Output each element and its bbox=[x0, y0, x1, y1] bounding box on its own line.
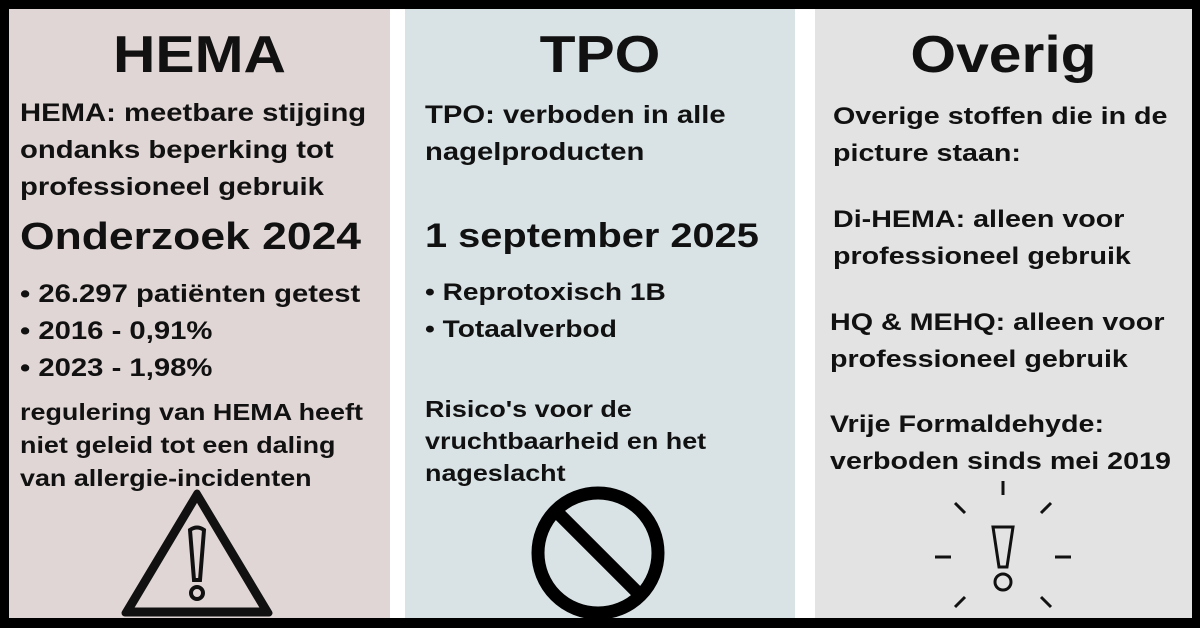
bullet list: • 2016 - 0,91% bbox=[20, 317, 212, 345]
text block: HQ & MEHQ: professioneel gebruik bbox=[830, 346, 1128, 373]
text block: HQ & MEHQ: HQ & MEHQ: alleen voor bbox=[830, 309, 1164, 336]
text block: conclusion: van allergie-incidenten bbox=[20, 465, 312, 491]
bullet list: • 26.297 patiënten getest bbox=[20, 280, 360, 308]
icon: warning triangle bbox=[122, 490, 272, 616]
text block: conclusion: regulering van HEMA heeft bbox=[20, 399, 363, 425]
subheading: date: 1 september 2025 bbox=[425, 217, 759, 255]
heading: Overig: Overig bbox=[910, 26, 1097, 84]
text block: risks: vruchtbaarheid en het bbox=[425, 428, 706, 454]
bullet list: • 2023 - 1,98% bbox=[20, 354, 212, 382]
text block: formaldehyde: verboden sinds mei 2019 bbox=[830, 448, 1171, 475]
panel: HEMA bbox=[9, 9, 390, 618]
text block: formaldehyde bbox=[830, 411, 1171, 475]
bullet list: • Reprotoxisch 1B bbox=[425, 279, 666, 306]
icon: exclamation with rays bbox=[935, 481, 1071, 608]
heading: TPO: TPO bbox=[540, 26, 660, 84]
text block: Di-HEMA bbox=[833, 206, 1131, 270]
text block: risks: nageslacht bbox=[425, 460, 566, 486]
text block: TPO intro: TPO: verboden in alle bbox=[425, 101, 726, 129]
text block: HEMA intro: professioneel gebruik bbox=[20, 173, 324, 201]
text block: conclusion bbox=[20, 399, 363, 491]
text block: Di-HEMA: Di-HEMA: alleen voor bbox=[833, 206, 1124, 233]
text block: Di-HEMA: professioneel gebruik bbox=[833, 243, 1131, 270]
bullet list bbox=[20, 280, 360, 382]
text block: TPO intro: nagelproducten bbox=[425, 138, 644, 166]
bullet list: • Totaalverbod bbox=[425, 316, 617, 343]
text block: TPO intro bbox=[425, 101, 726, 166]
panel: TPO bbox=[405, 9, 795, 618]
text block: risks bbox=[425, 396, 706, 486]
text block: intro bbox=[833, 103, 1167, 167]
text block: formaldehyde: Vrije Formaldehyde: bbox=[830, 411, 1104, 438]
text block: risks: Risico's voor de bbox=[425, 396, 632, 422]
text block: HEMA intro: ondanks beperking tot bbox=[20, 136, 334, 164]
text block: conclusion: niet geleid tot een daling bbox=[20, 432, 335, 458]
bullet list bbox=[425, 279, 666, 343]
panel: Overig bbox=[815, 9, 1192, 618]
icon: prohibition sign bbox=[532, 486, 664, 618]
text block: HQ & MEHQ bbox=[830, 309, 1164, 373]
text block: intro: picture staan: bbox=[833, 140, 1021, 167]
text block: HEMA intro bbox=[20, 99, 366, 201]
text block: HEMA intro: HEMA: meetbare stijging bbox=[20, 99, 366, 127]
heading: HEMA: HEMA bbox=[113, 26, 286, 84]
text block: intro: Overige stoffen die in de bbox=[833, 103, 1167, 130]
subheading: Onderzoek 2024: Onderzoek 2024 bbox=[20, 216, 361, 258]
